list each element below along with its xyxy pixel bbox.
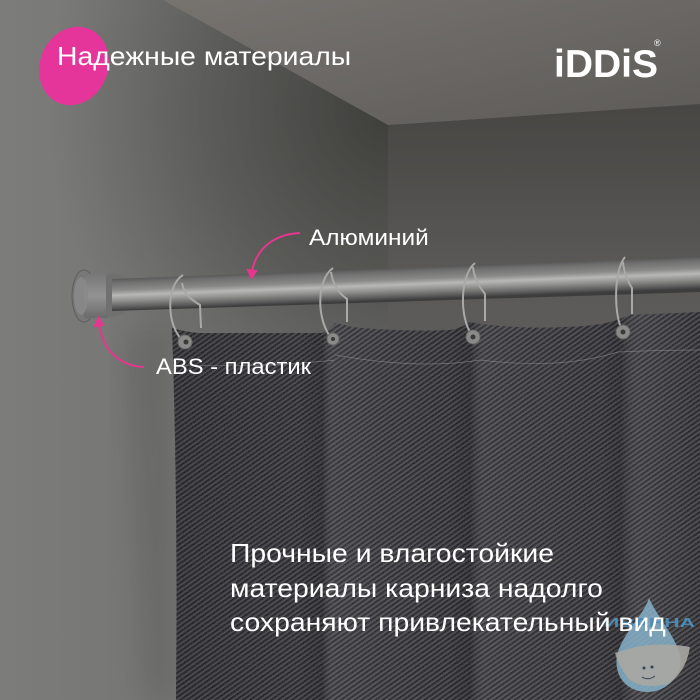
rod (aluminium) bbox=[112, 257, 700, 311]
watermark: water drop bbox=[604, 598, 696, 692]
wall flange (ABS plastic) bbox=[72, 270, 125, 322]
arrow: ABS label bbox=[95, 318, 144, 367]
label: ABS plastic: ABS - пластик bbox=[156, 354, 311, 379]
body text bbox=[230, 538, 666, 637]
curtain bbox=[172, 312, 700, 700]
pink blob bbox=[27, 16, 121, 116]
curtain rings bbox=[170, 257, 632, 341]
title: Надежные материалы bbox=[57, 41, 351, 71]
curtain shadow on wall bbox=[125, 330, 175, 700]
right wall bbox=[388, 104, 700, 700]
arrow: aluminium label bbox=[248, 233, 300, 278]
label: aluminium: Алюминий bbox=[309, 225, 429, 250]
logo: IDDIS: iDDiS bbox=[554, 43, 658, 86]
watermark: water drop: ИВАННА bbox=[604, 615, 696, 630]
logo: IDDIS: ® bbox=[654, 38, 661, 48]
eyelets bbox=[178, 325, 630, 349]
body text: Прочные и влагостойкие bbox=[230, 538, 554, 568]
body text: сохраняют привлекательный вид bbox=[230, 607, 666, 637]
ceiling bbox=[163, 0, 700, 125]
body text: материалы карниза надолго bbox=[230, 572, 603, 602]
